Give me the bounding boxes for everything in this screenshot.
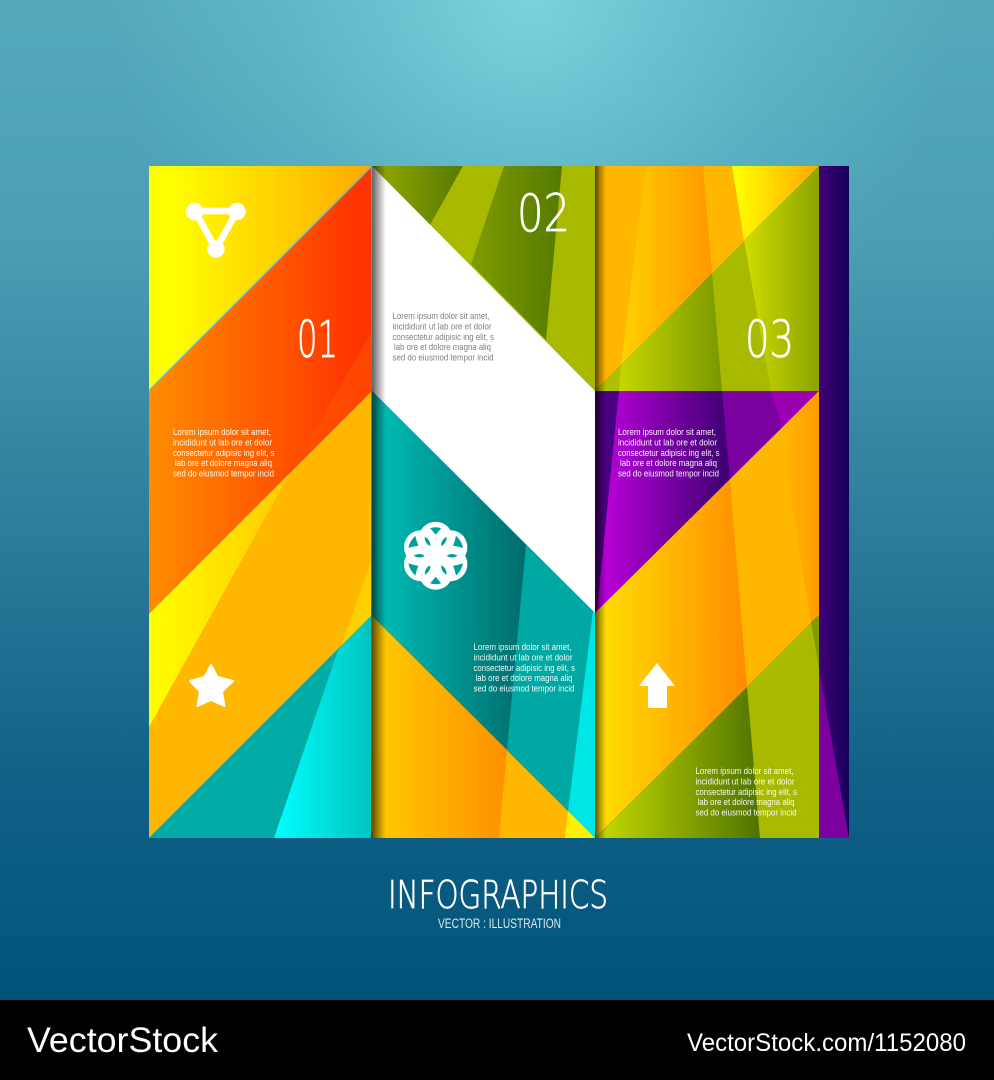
icon: up arrow xyxy=(639,663,675,708)
text block: column 3 bottom: lab ore et dolore magna aliq xyxy=(698,797,795,807)
text block: column 1: consectetur adipisic ing elit, s xyxy=(173,448,275,458)
panel: column 2 xyxy=(372,166,595,838)
text block: column 1: incididunt ut lab ore et dolor xyxy=(173,438,272,448)
text block: column 3 bottom xyxy=(696,766,798,818)
purple triangle xyxy=(595,391,819,613)
soft orange facet xyxy=(290,333,371,473)
white band xyxy=(372,166,595,613)
orange gradient facet xyxy=(621,166,712,366)
number 01: 01 xyxy=(297,311,338,370)
panel: column 3 xyxy=(595,166,819,838)
dark violet strip xyxy=(819,166,849,838)
text block: column 3 bottom: Lorem ipsum dolor sit amet, xyxy=(696,766,794,776)
bright purple facet xyxy=(771,391,819,428)
text block: column 2 top: lab ore et dolore magna aliq xyxy=(394,342,491,352)
icon: star xyxy=(190,665,233,706)
yellow facet xyxy=(732,166,819,240)
left olive facet xyxy=(595,366,621,391)
subtitle: VECTOR : ILLUSTRATION xyxy=(438,916,561,931)
orange gradient facet lower xyxy=(595,480,747,838)
text block: column 3 top: incididunt ut lab ore et dolor xyxy=(618,438,717,448)
text block: column 3 bottom: sed do eiusmod tempor incid xyxy=(696,808,797,818)
footer url: VectorStock.com/1152080 xyxy=(687,1029,966,1057)
purple gradient facet xyxy=(597,391,730,611)
yellow right facet xyxy=(340,562,371,648)
orange bottom triangle xyxy=(372,616,595,838)
panel: right strip xyxy=(819,166,849,838)
left dark purple xyxy=(595,391,619,611)
number 03: 03 xyxy=(745,311,794,370)
text block: column 3 top: consectetur adipisic ing elit, s xyxy=(618,448,720,458)
text block: column 1 xyxy=(173,427,275,478)
purple facet xyxy=(819,668,849,838)
text block: column 3 top: sed do eiusmod tempor incid xyxy=(618,468,719,478)
dark olive facet xyxy=(619,273,722,391)
right orange facet xyxy=(780,391,819,622)
olive top triangle xyxy=(372,166,595,391)
bright olive facet xyxy=(744,166,819,391)
yellow corner facet xyxy=(565,811,595,838)
cyan facet xyxy=(274,616,371,838)
text block: column 3 top: Lorem ipsum dolor sit amet, xyxy=(618,427,716,437)
text block: column 2 bottom: sed do eiusmod tempor incid xyxy=(474,684,575,694)
cyan facet xyxy=(568,611,595,838)
text block: column 2 top: Lorem ipsum dolor sit amet, xyxy=(392,311,490,321)
text block: column 3 bottom: incididunt ut lab ore et dolor xyxy=(696,776,795,786)
number 02: 02 xyxy=(517,184,570,244)
text block: column 2 top: sed do eiusmod tempor incid xyxy=(392,352,494,362)
dark teal facet xyxy=(372,391,526,750)
text block: column 2 bottom: lab ore et dolore magna aliq xyxy=(476,673,573,683)
amber band xyxy=(595,391,819,838)
yellow facet xyxy=(149,473,290,727)
dark green centre facet xyxy=(471,166,562,340)
panel: column 1 xyxy=(149,166,371,838)
teal triangle xyxy=(149,616,371,838)
text block: column 2 bottom xyxy=(474,642,576,694)
title xyxy=(388,873,608,931)
text block: column 3 bottom: consectetur adipisic ing elit, s xyxy=(696,787,798,797)
footer brand: VectorStock xyxy=(27,1021,219,1060)
yellow top triangle xyxy=(149,166,371,391)
text block: column 3 top: lab ore et dolore magna aliq xyxy=(620,458,717,468)
text block: column 2 top xyxy=(392,311,495,362)
orange gradient facet xyxy=(372,616,507,838)
icon: triangle nodes xyxy=(186,203,246,258)
column 2 fold shadow xyxy=(372,166,386,838)
text block: column 2 bottom: incididunt ut lab ore et dolor xyxy=(474,652,573,662)
column 3 fold shadow xyxy=(595,166,606,838)
amber top triangle xyxy=(595,166,819,391)
text block: column 3 top xyxy=(618,427,720,478)
amber band xyxy=(149,392,371,838)
olive band xyxy=(595,166,819,391)
footer bar xyxy=(0,1000,994,1080)
olive bottom triangle xyxy=(595,615,819,838)
text block: column 2 bottom: consectetur adipisic ing elit, s xyxy=(474,663,576,673)
dark green left facet xyxy=(372,166,463,225)
dark green facet xyxy=(596,687,760,838)
text block: column 2 top: incididunt ut lab ore et dolor xyxy=(392,322,492,332)
icon: flower xyxy=(404,522,467,590)
text block: column 2 bottom: Lorem ipsum dolor sit amet, xyxy=(474,642,572,652)
text block: column 1: lab ore et dolore magna aliq xyxy=(175,458,272,468)
orange red band xyxy=(149,166,371,614)
text block: column 2 top: consectetur adipisic ing elit, s xyxy=(392,332,495,342)
text block: column 1: sed do eiusmod tempor incid xyxy=(173,468,274,478)
text block: column 1: Lorem ipsum dolor sit amet, xyxy=(173,427,271,437)
diagonal highlight line xyxy=(150,167,371,390)
small olive facet xyxy=(811,615,819,668)
heading: INFOGRAPHICS xyxy=(388,873,608,918)
teal band xyxy=(372,391,595,838)
